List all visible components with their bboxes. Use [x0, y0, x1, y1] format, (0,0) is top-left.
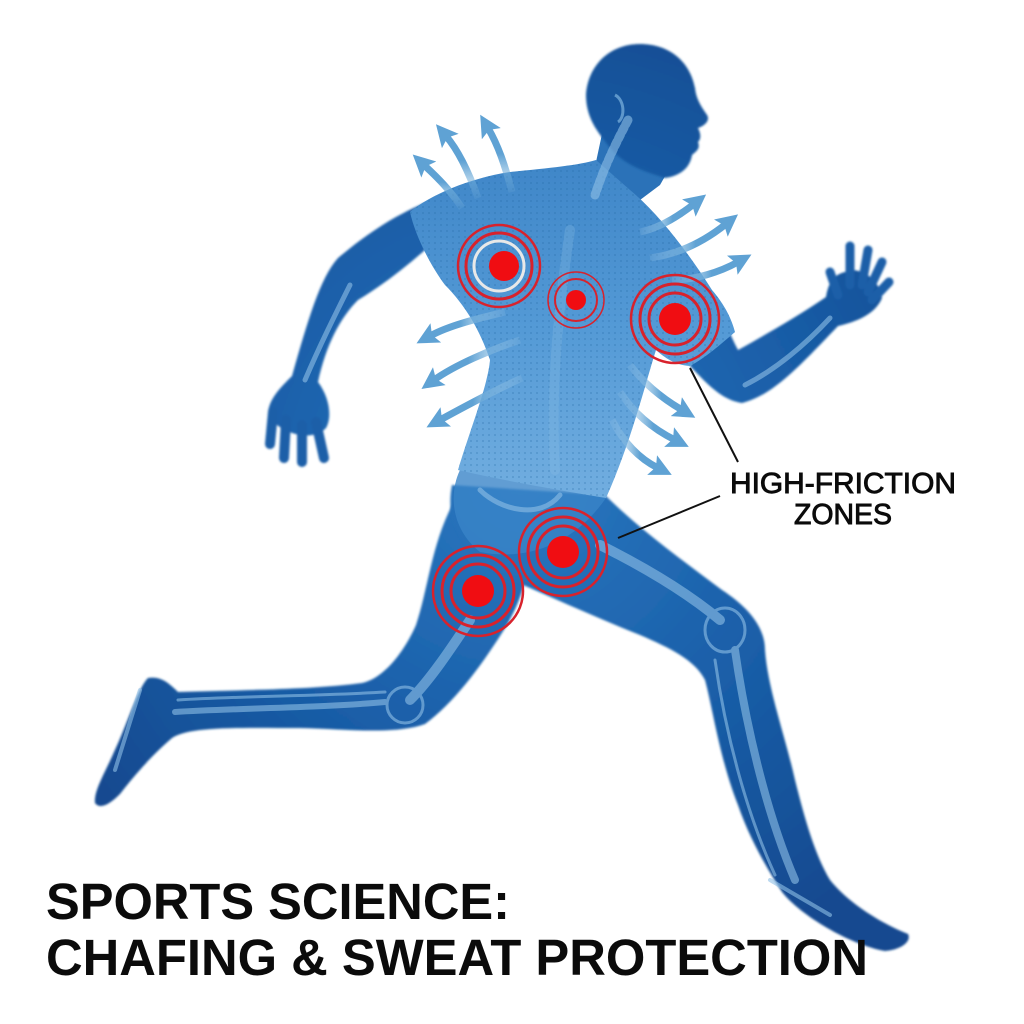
skeleton details — [115, 120, 830, 915]
hip and pelvis shading — [454, 470, 606, 554]
title: CHAFING & SWEAT PROTECTION — [46, 929, 868, 986]
sweat arrows: shoulders — [424, 128, 512, 208]
right arm (viewer right) with hand — [690, 246, 889, 403]
callout label: high-friction zones: HIGH-FRICTION — [730, 468, 956, 500]
shirt — [410, 160, 735, 498]
neck — [590, 120, 680, 200]
sweat arrows: left of torso — [430, 312, 522, 420]
friction zone: inner thigh — [433, 546, 523, 636]
callout leader lines — [618, 368, 738, 538]
friction zone: left shoulder — [458, 225, 540, 307]
friction zone: upper thigh — [519, 508, 607, 596]
shirt mesh — [410, 160, 735, 498]
sweat arrows: chest — [640, 204, 738, 280]
back leg — [95, 500, 527, 806]
friction zone: sternum — [548, 272, 604, 328]
fingers — [830, 246, 889, 300]
friction zone: right chest — [631, 275, 719, 363]
head — [586, 44, 708, 178]
left arm (viewer left) with hand — [268, 203, 425, 462]
callout label: high-friction zones: ZONES — [794, 499, 892, 531]
face highlight — [615, 95, 623, 122]
sweat arrows: right of torso — [612, 365, 682, 468]
runner figure — [95, 44, 909, 951]
front leg — [450, 485, 909, 951]
title: SPORTS SCIENCE: — [46, 873, 510, 930]
fingers — [270, 412, 324, 462]
